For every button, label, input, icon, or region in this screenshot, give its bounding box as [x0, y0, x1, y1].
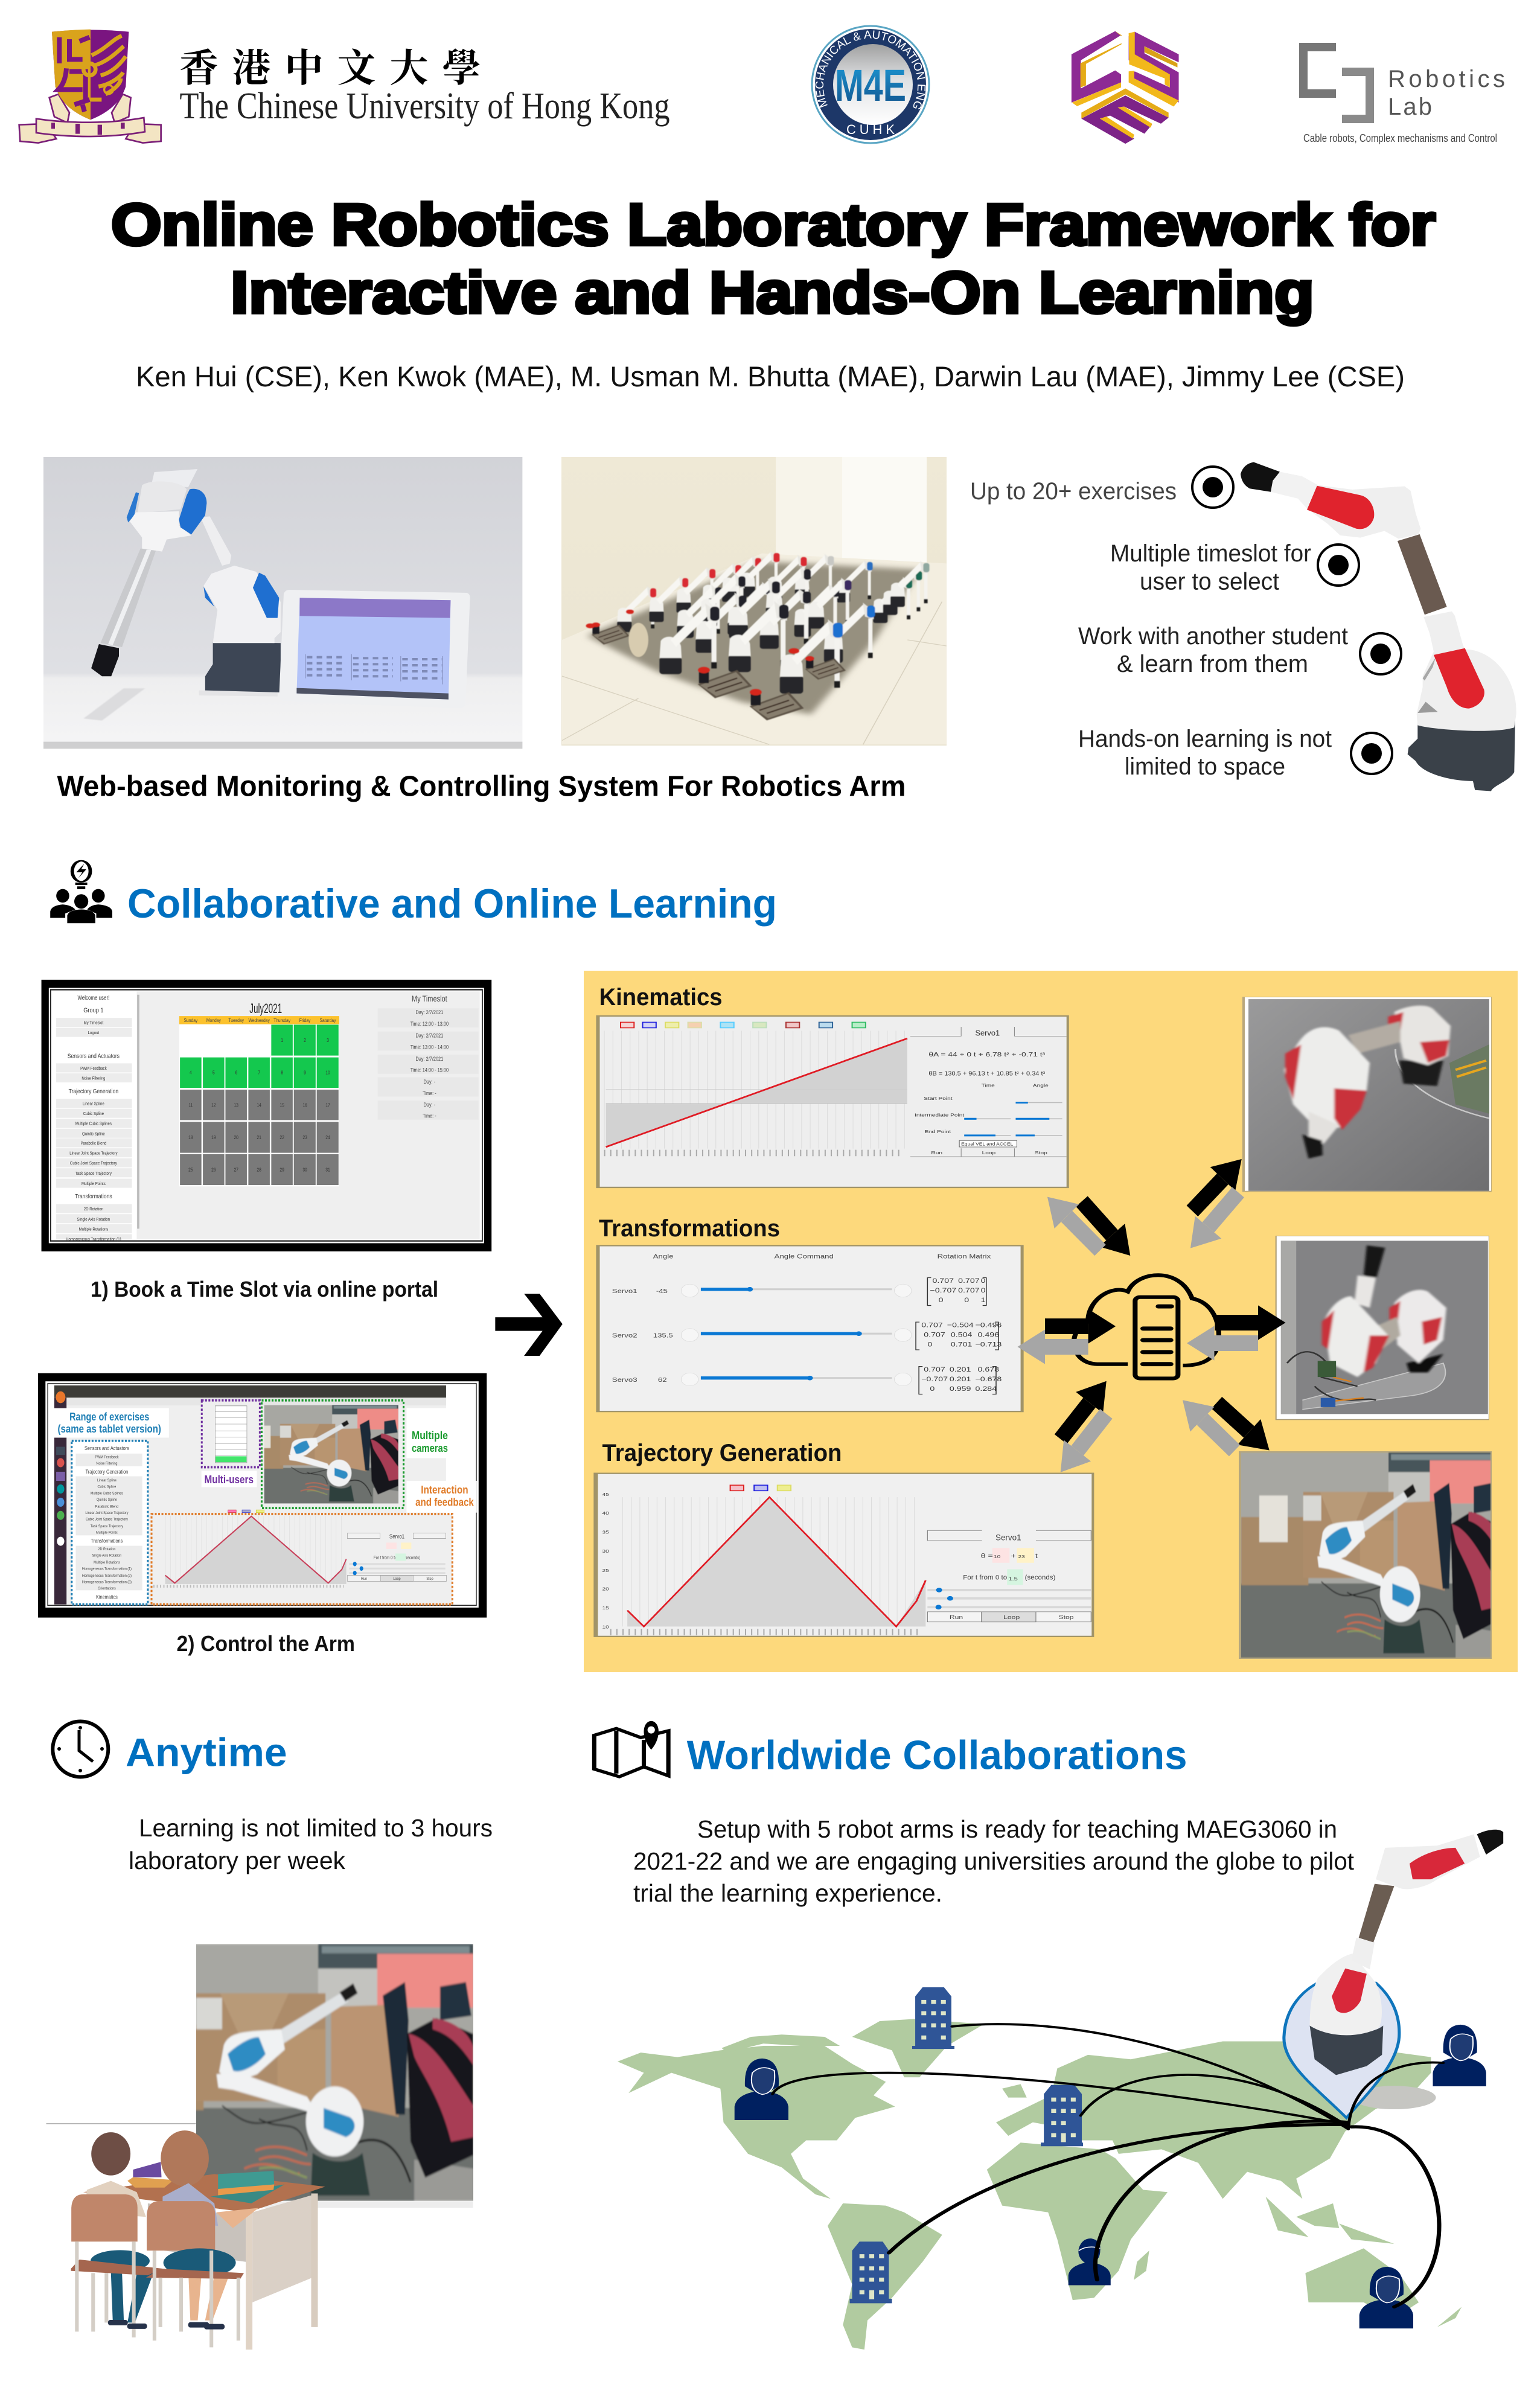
- heading: Anytime: Anytime: [126, 1730, 287, 1774]
- timeslot list: Day: 2/7/2021: [416, 1033, 444, 1039]
- panel: booking portal screenshot: Quintic Spline: [82, 1132, 105, 1136]
- interaction label: and feedback: [415, 1497, 474, 1509]
- transformations screenshot: −0.707: [930, 1287, 956, 1294]
- transformations screenshot: 0.707: [924, 1331, 945, 1338]
- timeslot list: Time: -: [423, 1113, 436, 1119]
- text: anytime description: [129, 1814, 493, 1874]
- camera label: cameras: [412, 1442, 448, 1454]
- panel: booking portal screenshot: Multiple Rotations: [79, 1227, 109, 1232]
- multi-user panel: Multi-users: [205, 1472, 254, 1486]
- panel: yellow exercises and robots: [584, 971, 1518, 1672]
- trajectory screenshot: Stop: [1058, 1614, 1074, 1621]
- panel: booking portal screenshot: Task Space Trajectory: [75, 1171, 112, 1176]
- calendar: Friday: [299, 1017, 311, 1023]
- timeslot list: Day: -: [424, 1079, 435, 1085]
- heading: Collaborative and Online Learning: Collaborative and Online Learning: [127, 881, 777, 927]
- callout: timeslot: Multiple timeslot for: [1110, 540, 1311, 567]
- calendar: 15: [280, 1102, 284, 1108]
- scroll banner: [19, 94, 161, 143]
- multi-user panel: [202, 1401, 260, 1487]
- photo: robot close-up: [1242, 997, 1492, 1192]
- heading: Transformations: Transformations: [599, 1215, 780, 1242]
- C3 Robotics Lab logo: [1303, 47, 1505, 144]
- world map: [618, 1830, 1503, 2350]
- exercise list: Cubic Joint Space Trajectory: [86, 1517, 129, 1522]
- title: Interactive and Hands-On Learning: [231, 260, 1314, 325]
- panel: booking portal screenshot: Cubic Joint Space Trajectory: [70, 1161, 117, 1166]
- camera panel: [232, 1401, 406, 1508]
- CUHK English name: The Chinese University of Hong Kong: [180, 86, 670, 127]
- callout: work with student: & learn from them: [1117, 651, 1308, 677]
- transformations screenshot: 0: [964, 1297, 969, 1304]
- building: Europe: [1041, 2085, 1083, 2146]
- feedback chart panel: For t from 0 to 1.5 (seconds): [374, 1556, 420, 1561]
- calendar: 5: [212, 1070, 215, 1076]
- kinematics controls: End Point: [924, 1129, 951, 1134]
- transformations screenshot: 0.707: [958, 1277, 980, 1285]
- MAE logo: CUHK: [846, 122, 895, 137]
- robot fleet: [617, 551, 929, 694]
- exercise list: Parabolic Blend: [95, 1504, 119, 1509]
- person: Africa: [1069, 2238, 1111, 2286]
- panel: control interface screenshot: [38, 1373, 487, 1618]
- calendar: 4: [190, 1070, 192, 1076]
- calendar: 20: [234, 1134, 238, 1140]
- calendar: 30: [302, 1167, 307, 1173]
- calendar: 23: [302, 1134, 307, 1140]
- exercise list: Quintic Spline: [97, 1498, 117, 1502]
- exercise list: Cubic Spline: [97, 1484, 117, 1489]
- callout: hands-on: Hands-on learning is not: [1078, 726, 1332, 752]
- calendar: 28: [257, 1167, 261, 1173]
- transformations screenshot: −0.504: [947, 1321, 974, 1329]
- panel: booking portal screenshot: [42, 980, 491, 1251]
- exercise list: [72, 1441, 148, 1605]
- trajectory screenshot: 45: [602, 1492, 609, 1497]
- exercise list: Linear Spline: [97, 1478, 117, 1483]
- interaction label: Interaction: [421, 1484, 468, 1496]
- calendar: 10: [325, 1070, 330, 1076]
- text: worldwide description: [633, 1815, 1355, 1907]
- step 2 label: 2) Control the Arm: [176, 1631, 355, 1656]
- building: South America: [849, 2241, 892, 2303]
- calendar: 13: [234, 1102, 238, 1108]
- text: worldwide description: Setup with 5 robot arms is ready for teaching MAEG3060 in: [697, 1815, 1337, 1843]
- arrow: transformations to cloud: [1045, 1318, 1088, 1334]
- calendar: 12: [211, 1102, 216, 1108]
- CSE logo: [1072, 31, 1179, 144]
- exercise list: Orientations: [98, 1586, 116, 1591]
- trajectory screenshot: Servo1: [995, 1533, 1021, 1542]
- exercise list: Homogeneous Transformation (1): [82, 1567, 132, 1571]
- exercise list: Sensors and Actuators: [85, 1445, 129, 1451]
- kinematics screenshot: Equal VEL and ACCEL: [961, 1142, 1013, 1146]
- calendar: 14: [257, 1102, 261, 1108]
- title: Online Robotics Laboratory Framework for: [111, 192, 1436, 257]
- transformations screenshot: Angle Command: [775, 1253, 834, 1260]
- feedback chart panel: Servo1: [389, 1533, 404, 1540]
- calendar: 17: [325, 1102, 330, 1108]
- transformations screenshot: Angle: [653, 1253, 673, 1260]
- building: north: [912, 1987, 954, 2049]
- calendar: July2021: [249, 1001, 282, 1016]
- location pin with robot arm: [1284, 1830, 1503, 2118]
- arrow: kinematics to cloud: [1082, 1201, 1112, 1235]
- kinematics controls: Time: [982, 1083, 995, 1088]
- exercise list: PWM Feedback: [95, 1455, 119, 1460]
- feedback chart panel: [152, 1510, 452, 1605]
- trajectory screenshot: t: [1035, 1553, 1038, 1560]
- photo: remote arm view: [196, 1944, 473, 2201]
- arrow: trajectory to cloud: [1061, 1403, 1090, 1439]
- calendar: 18: [188, 1134, 193, 1140]
- trajectory screenshot: 23: [1018, 1554, 1025, 1559]
- exercise list: Noise Filtering: [96, 1461, 118, 1466]
- person: North America: [735, 2059, 788, 2120]
- exercise list: 2D Rotation: [98, 1547, 116, 1551]
- calendar: Wednesday: [248, 1017, 270, 1023]
- callout: exercises: [970, 467, 1233, 508]
- trajectory screenshot: 10: [602, 1624, 609, 1629]
- CUHK Chinese name: 香港中文大學: [180, 37, 481, 93]
- step 1 label: 1) Book a Time Slot via online portal: [91, 1277, 438, 1302]
- calendar: [179, 1001, 339, 1186]
- calendar: 26: [211, 1167, 216, 1173]
- exercise list: Multiple Points: [96, 1530, 118, 1535]
- transformations screenshot: 62: [658, 1376, 667, 1383]
- transformations screenshot: Rotation Matrix: [938, 1253, 991, 1260]
- calendar: 16: [302, 1102, 307, 1108]
- trajectory screenshot: θ =: [981, 1553, 993, 1560]
- panel: booking portal screenshot: Parabolic Blend: [80, 1142, 106, 1146]
- timeslot list: My Timeslot: [412, 994, 447, 1003]
- exercise list: Trajectory Generation: [86, 1469, 129, 1475]
- panel: booking portal screenshot: Trajectory Generation: [69, 1088, 118, 1095]
- callout: work with student: Work with another student: [1078, 623, 1348, 650]
- interaction label: [406, 1481, 477, 1513]
- panel: booking portal screenshot: Sensors and Actuators: [68, 1053, 120, 1060]
- timeslot list: Time: 12:00 - 13:00: [411, 1021, 449, 1027]
- transformations screenshot: 0.707: [924, 1366, 945, 1373]
- illustration: students at desk: [46, 2124, 473, 2350]
- text: worldwide description: 2021-22 and we are engaging universities around the globe to pilot: [633, 1847, 1355, 1875]
- callout: exercises: Up to 20+ exercises: [970, 478, 1177, 505]
- MAE logo: [811, 25, 930, 144]
- C3 Robotics Lab logo: Cable robots, Complex mechanisms and Control: [1303, 132, 1497, 144]
- transformations screenshot: 0.201: [950, 1376, 971, 1383]
- timeslot list: Day: 2/7/2021: [416, 1009, 444, 1015]
- trajectory screenshot: (seconds): [1025, 1574, 1055, 1581]
- cluster shadow: [587, 561, 920, 714]
- trajectory screenshot: For t from 0 to: [963, 1574, 1007, 1581]
- transformations screenshot: 0.701: [951, 1341, 972, 1348]
- kinematics screenshot: Loop: [982, 1150, 995, 1155]
- calendar: 7: [258, 1070, 260, 1076]
- transformations screenshot: 0.496: [978, 1331, 999, 1338]
- transformations screenshot: Servo1: [612, 1288, 637, 1294]
- C3 Robotics Lab logo: Robotics: [1388, 66, 1505, 92]
- icon: bulb and people: [50, 861, 112, 923]
- icon: cloud server: [1074, 1275, 1219, 1378]
- transformations screenshot: 0.707: [932, 1277, 954, 1285]
- photo: robot pair: [1276, 1236, 1489, 1420]
- text: anytime description: Learning is not limited to 3 hours: [139, 1814, 493, 1842]
- feedback chart panel: Run: [361, 1577, 368, 1581]
- panel: booking portal screenshot: Homogeneous Transformation (1): [66, 1237, 121, 1242]
- exercise list: Kinematics: [96, 1594, 118, 1600]
- calendar: 25: [188, 1167, 193, 1173]
- transformations screenshot: −0.496: [975, 1321, 1002, 1329]
- panel: booking portal screenshot: Noise Filtering: [81, 1076, 106, 1081]
- trajectory screenshot: 15: [602, 1605, 609, 1611]
- kinematics screenshot: Stop: [1035, 1150, 1047, 1155]
- timeslot list: Day: 2/7/2021: [416, 1056, 444, 1062]
- panel: booking portal screenshot: Welcome user!: [77, 994, 109, 1001]
- exercise list: Homogeneous Transformation (2): [82, 1573, 132, 1578]
- callout: hands-on: limited to space: [1125, 753, 1285, 780]
- exercise list: Multiple Rotations: [94, 1561, 120, 1565]
- arrow: cloud to robot 3: [1217, 1403, 1249, 1432]
- trajectory screenshot: Run: [950, 1614, 963, 1621]
- callout: timeslot: user to select: [1140, 569, 1279, 595]
- exercise list: Linear Joint Space Trajectory: [85, 1510, 129, 1515]
- exercise list: Transformations: [91, 1538, 123, 1544]
- calendar: Saturday: [320, 1017, 336, 1023]
- transformations screenshot: −0.707: [921, 1376, 948, 1383]
- timeslot list: [378, 994, 479, 1120]
- camera label: [406, 1408, 448, 1458]
- trajectory screenshot: 20: [602, 1586, 609, 1591]
- calendar: 1: [281, 1037, 283, 1043]
- calendar: 2: [304, 1037, 306, 1043]
- arrow: cloud to kinematics: [1067, 1216, 1100, 1250]
- shield: [52, 30, 129, 120]
- panel: booking portal screenshot: Linear Spline: [83, 1102, 104, 1107]
- panel: booking portal screenshot: My Timeslot: [84, 1021, 103, 1026]
- calendar: 29: [280, 1167, 284, 1173]
- panel: booking portal screenshot: Linear Joint Space Trajectory: [69, 1151, 118, 1156]
- calendar: Tuesday: [228, 1017, 244, 1023]
- calendar: 31: [325, 1167, 330, 1173]
- calendar: 27: [234, 1167, 238, 1173]
- timeslot list: Time: 13:00 - 14:00: [411, 1044, 449, 1050]
- panel: booking portal screenshot: PWM Feedback: [80, 1066, 107, 1071]
- transformations screenshot: Servo3: [612, 1376, 637, 1383]
- kinematics controls: Angle: [1033, 1083, 1049, 1088]
- text: anytime description: laboratory per week: [129, 1847, 345, 1874]
- exercise list: Multiple Cubic Splines: [91, 1491, 123, 1496]
- CUHK logo: [19, 30, 161, 143]
- arrow: cloud to transformations: [1045, 1339, 1088, 1355]
- timeslot list: Time: 14:00 - 15:00: [411, 1067, 449, 1073]
- exercise list: Task Space Trajectory: [91, 1524, 124, 1529]
- kinematics controls: Start Point: [924, 1096, 953, 1101]
- arrow: portal to robot: [495, 1294, 563, 1356]
- arrow: robot 3 to cloud: [1203, 1419, 1235, 1451]
- heading: Worldwide Collaborations: Worldwide Collaborations: [687, 1733, 1187, 1778]
- calendar: 22: [280, 1134, 284, 1140]
- calendar: 11: [188, 1102, 193, 1108]
- kinematics controls: Servo1: [975, 1029, 1000, 1038]
- calendar: 6: [235, 1070, 237, 1076]
- calendar: 24: [325, 1134, 330, 1140]
- transformations screenshot: 0.707: [958, 1287, 980, 1294]
- exercise range callout: Range of exercises: [69, 1410, 149, 1423]
- panel: booking portal screenshot: Group 1: [83, 1007, 104, 1014]
- panel: booking portal screenshot: Multiple Cubic Splines: [75, 1122, 112, 1126]
- tablet: [279, 590, 470, 708]
- arrow: cloud to trajectory: [1078, 1414, 1106, 1451]
- trajectory screenshot: 25: [602, 1568, 609, 1573]
- person: East Asia: [1433, 2025, 1486, 2086]
- callout: timeslot: [1110, 540, 1359, 595]
- arrow: cloud to robot 1: [1192, 1179, 1222, 1211]
- photo: robot arm with tablet: [43, 457, 522, 749]
- calendar: Thursday: [273, 1017, 290, 1023]
- panel: booking portal screenshot: Transformations: [75, 1193, 112, 1200]
- transformations screenshot: 0.707: [921, 1321, 943, 1329]
- trajectory screenshot: +: [1011, 1553, 1016, 1560]
- trajectory screenshot: 10: [994, 1554, 1000, 1559]
- transformations screenshot: -45: [656, 1288, 668, 1294]
- photo: fleet of robot arms: [561, 457, 947, 746]
- calendar: Sunday: [184, 1017, 198, 1023]
- callout: hands-on: [1078, 726, 1392, 780]
- transformations screenshot: −0.678: [975, 1376, 1002, 1383]
- panel: booking portal screenshot: Multiple Points: [81, 1182, 106, 1186]
- calendar: Monday: [206, 1017, 221, 1023]
- panel: booking portal screenshot: 2D Rotation: [84, 1207, 103, 1212]
- trajectory screenshot: 35: [602, 1530, 609, 1535]
- transformations screenshot: 0: [981, 1277, 986, 1285]
- transformations screenshot: 0.201: [950, 1366, 971, 1373]
- photo caption: Web-based Monitoring & Controlling System For Robotics Arm: [57, 770, 906, 803]
- transformations screenshot: 0.959: [950, 1385, 971, 1393]
- arrow: cloud to robot 2: [1215, 1315, 1258, 1331]
- callout: work with student: [1078, 623, 1401, 677]
- panel: booking portal screenshot: Logout: [88, 1031, 99, 1035]
- kinematics controls: θB = 130.5 + 96.13 t + 10.85 t² + 0.34 t³: [928, 1070, 1045, 1077]
- transformations screenshot: Servo2: [612, 1332, 637, 1339]
- transformations screenshot: 0: [930, 1385, 935, 1393]
- transformations screenshot: 0: [939, 1297, 944, 1304]
- exercise range callout: [52, 1408, 169, 1438]
- arrow: robot 1 to cloud: [1209, 1192, 1238, 1227]
- timeslot list: Day: -: [424, 1102, 435, 1108]
- person: Australia: [1359, 2267, 1413, 2328]
- camera label: Multiple: [412, 1430, 448, 1442]
- transformations screenshot: 0.284: [975, 1385, 997, 1393]
- transformations screenshot: [596, 1245, 1024, 1412]
- exercise list: Single Axis Rotation: [92, 1553, 122, 1558]
- transformations screenshot: 135.5: [653, 1332, 673, 1339]
- panel: booking portal screenshot: Single Axis Rotation: [77, 1217, 110, 1222]
- feedback chart panel: Stop: [426, 1577, 433, 1581]
- robot arm with feature callouts: [970, 462, 1516, 791]
- calendar: 21: [257, 1134, 261, 1140]
- trajectory screenshot: 1.5: [1008, 1576, 1018, 1582]
- exercise list: Homogeneous Transformation (3): [82, 1580, 132, 1585]
- transformations screenshot: 0: [981, 1287, 986, 1294]
- photo: robot in room: [1225, 1451, 1510, 1659]
- calendar: 8: [281, 1070, 283, 1076]
- calendar: 3: [327, 1037, 329, 1043]
- feedback chart panel: Loop: [393, 1577, 401, 1581]
- kinematics controls: [910, 1027, 1067, 1134]
- transformations screenshot: −0.713: [975, 1341, 1002, 1348]
- trajectory screenshot: Loop: [1003, 1614, 1020, 1621]
- C3 Robotics Lab logo: Lab: [1388, 94, 1432, 120]
- kinematics controls: θA = 44 + 0 t + 6.78 t² + -0.71 t³: [928, 1051, 1045, 1058]
- transformations screenshot: 0.678: [978, 1366, 999, 1373]
- collaboration links: [773, 2024, 1443, 2307]
- heading: Trajectory Generation: Trajectory Generation: [602, 1440, 842, 1466]
- timeslot list: Time: -: [423, 1090, 436, 1096]
- kinematics screenshot: Run: [931, 1150, 942, 1155]
- title: [111, 192, 1436, 325]
- arrow: robot 2 to cloud: [1215, 1335, 1258, 1351]
- calendar: 9: [304, 1070, 306, 1076]
- text: worldwide description: trial the learning experience.: [633, 1879, 942, 1907]
- panel: booking portal screenshot: Cubic Spline: [83, 1112, 104, 1116]
- kinematics controls: Intermediate Point: [915, 1113, 965, 1117]
- transformations screenshot: 0.504: [951, 1331, 972, 1338]
- trajectory screenshot: 40: [602, 1510, 609, 1516]
- kinematics screenshot: [596, 1015, 1069, 1188]
- exercise range callout: (same as tablet version): [58, 1422, 161, 1436]
- transformations screenshot: 0: [927, 1341, 932, 1348]
- calendar: 19: [211, 1134, 216, 1140]
- heading: Kinematics: Kinematics: [599, 984, 722, 1011]
- transformations screenshot: 1: [981, 1297, 986, 1304]
- robot arm: [1241, 462, 1516, 791]
- trajectory screenshot: [593, 1473, 1094, 1637]
- control boards: [586, 609, 846, 720]
- trajectory screenshot: 30: [602, 1548, 609, 1554]
- icon: clock: [53, 1722, 108, 1777]
- MAE monogram: M4E: [835, 60, 906, 110]
- icon: folded map with pin: [594, 1721, 668, 1777]
- authors: Ken Hui (CSE), Ken Kwok (MAE), M. Usman M. Bhutta (MAE), Darwin Lau (MAE), Jimmy Lee (CSE): [136, 360, 1405, 392]
- continents: [618, 2019, 1462, 2350]
